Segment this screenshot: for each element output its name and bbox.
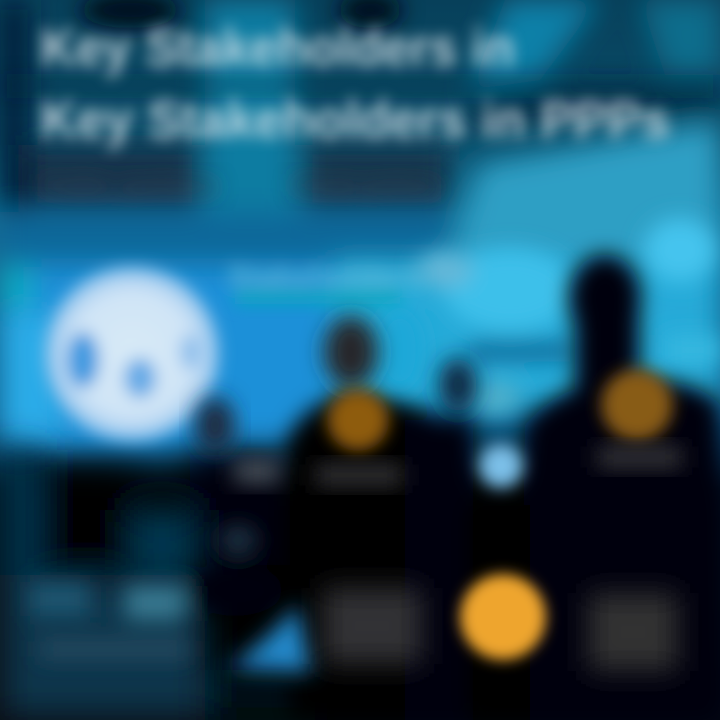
silhouette: small head at left (195, 397, 235, 453)
blue light between silhouettes (479, 444, 523, 488)
title (40, 18, 670, 150)
section heading: Stakeholders (228, 260, 423, 290)
bottom-left panel tiles (30, 525, 283, 658)
badge: highlighted amber icon (460, 574, 546, 660)
text block: lower right (588, 593, 678, 671)
badge: right amber icon (601, 369, 673, 441)
bottom-left blue patch (228, 605, 312, 672)
subtitle: Private partners (295, 173, 440, 200)
icon: white people circle (45, 267, 219, 441)
text block: lower centre (322, 588, 422, 664)
badge: centre amber icon (327, 389, 389, 451)
title: Key Stakeholders in PPPs (40, 90, 670, 150)
lower dark ground (0, 480, 720, 720)
light accents in the sky (374, 218, 720, 414)
subtitle: Public partners (42, 173, 217, 200)
dark shapes at the top of the scene (0, 0, 720, 92)
section heading (228, 260, 423, 304)
label: grey callout near crowd (234, 458, 280, 484)
silhouette group: left crowd (0, 450, 315, 720)
silhouette: centre person (285, 316, 477, 720)
silhouette: right person (470, 254, 720, 720)
label: right card text (597, 446, 682, 468)
subtitle (42, 173, 440, 200)
title: Key Stakeholders in (40, 18, 515, 78)
label: centre card text (315, 464, 403, 486)
background: blurred teal and blue scene (0, 0, 720, 450)
